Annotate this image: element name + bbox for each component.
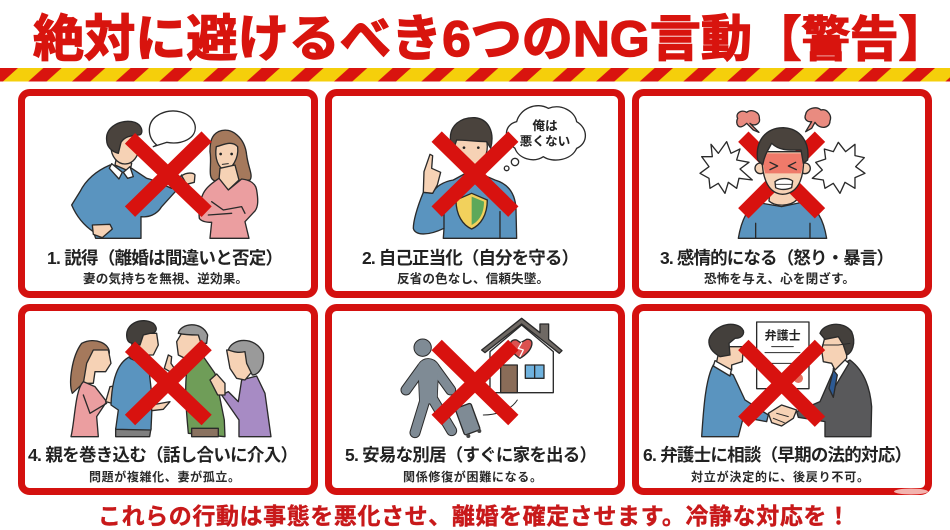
title: 【警告】 xyxy=(753,13,947,67)
hazard stripe band xyxy=(0,68,950,82)
description: 対立が決定的に、後戻り不可。 xyxy=(691,469,869,484)
footer message: これらの行動は事態を悪化させ、離婚を確定させます。冷静な対応を！ xyxy=(98,503,850,529)
red cross xyxy=(130,345,207,420)
description: 妻の気持ちを無視、逆効果。 xyxy=(83,271,248,286)
illustration: man and woman arguing xyxy=(72,111,258,238)
heading: 1. 説得（離婚は間違いと否定） xyxy=(47,248,283,268)
illustration: handshake with lawyer xyxy=(702,322,872,437)
red cross xyxy=(743,137,820,213)
decorative corner highlight xyxy=(894,488,928,494)
illustration: body and bursts xyxy=(700,108,865,238)
panel 3: emotional xyxy=(636,92,928,294)
description: 関係修復が困難になる。 xyxy=(403,469,542,484)
red cross xyxy=(743,345,820,422)
title: 絶対に避けるべき6つのNG言動 xyxy=(33,11,752,67)
panel 6: consulting a lawyer xyxy=(636,308,928,494)
heading: 6. 弁護士に相談（早期の法的対応） xyxy=(643,445,912,465)
illustration: man with shield: 俺は xyxy=(532,118,558,133)
illustration: couple and parents xyxy=(71,321,271,437)
description: 問題が複雑化、妻が孤立。 xyxy=(89,469,240,484)
panel 4: involving parents xyxy=(22,308,314,492)
description: 反省の色なし、信頼失墜。 xyxy=(397,271,549,286)
description: 恐怖を与え、心を閉ざす。 xyxy=(704,271,855,286)
illustration: person leaving broken-heart house xyxy=(406,318,562,438)
red cross xyxy=(437,345,513,420)
heading: 2. 自己正当化（自分を守る） xyxy=(362,248,579,268)
illustration: handshake with lawyer: 弁護士 xyxy=(765,327,801,342)
heading: 4. 親を巻き込む（話し合いに介入） xyxy=(28,445,298,465)
heading: 3. 感情的になる（怒り・暴言） xyxy=(660,248,894,268)
illustration: man with shield xyxy=(413,106,585,238)
illustration: angry head xyxy=(755,128,810,194)
heading: 5. 安易な別居（すぐに家を出る） xyxy=(345,445,597,465)
panel 5: hasty separation xyxy=(328,308,622,492)
illustration: man with shield: 悪くない xyxy=(520,135,570,149)
red cross xyxy=(437,137,513,212)
panel 2: self justification xyxy=(328,92,622,294)
panel 1: persuasion xyxy=(22,92,314,294)
red cross xyxy=(130,137,207,212)
